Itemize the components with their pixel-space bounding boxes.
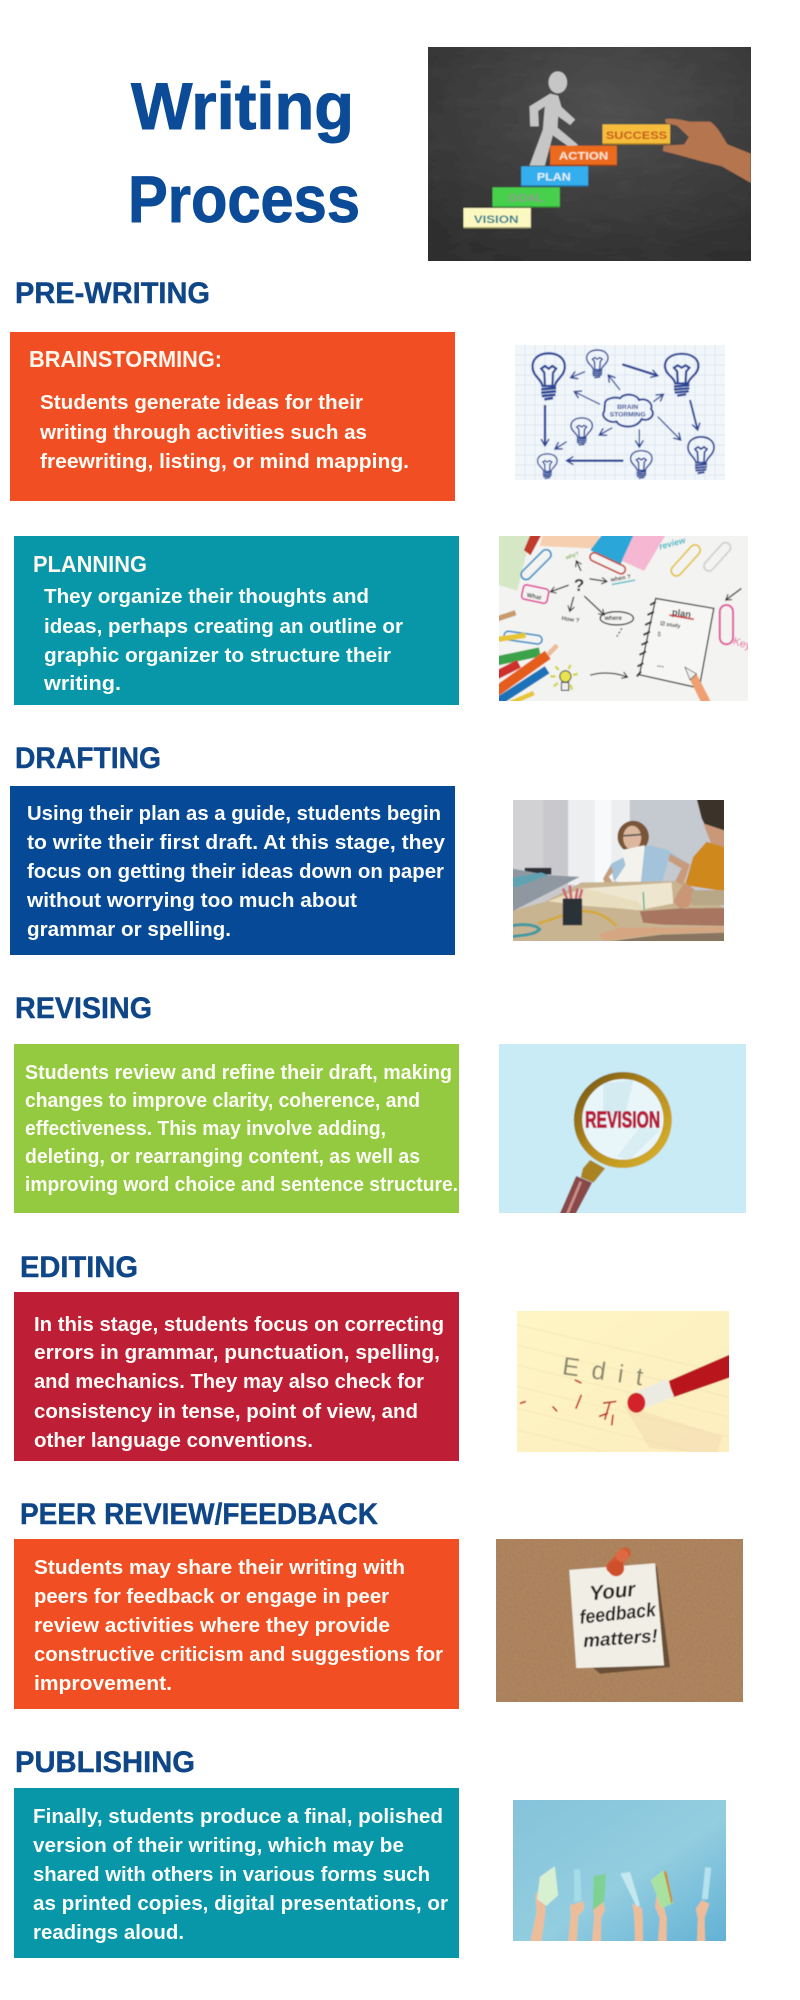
panel: brainstorming xyxy=(10,332,455,501)
text: revising description: effectiveness. This may involve adding, xyxy=(25,1117,386,1140)
image: planning notes with paper clips and pencils: How ? xyxy=(561,616,580,625)
image: figure climbing steps on chalkboard: PLAN xyxy=(537,171,571,183)
image: brainstorming bulbs sketch xyxy=(515,345,725,480)
text: planning description: They organize their thoughts and xyxy=(44,585,369,608)
panel: revising xyxy=(14,1044,459,1213)
title: Writing xyxy=(131,69,354,143)
text: publishing description xyxy=(33,1805,448,1944)
text: brainstorming description: Students generate ideas for their xyxy=(40,391,363,414)
text: planning description: ideas, perhaps creating an outline or xyxy=(44,615,403,638)
text: editing description: and mechanics. They may also check for xyxy=(34,1370,424,1393)
text: planning description xyxy=(43,585,403,695)
text: brainstorming description: writing through activities such as xyxy=(39,421,367,444)
panel: drafting xyxy=(10,786,455,955)
image: planning notes with paper clips and pencils: Key xyxy=(731,635,753,653)
text: drafting description: to write their first draft. At this stage, they xyxy=(27,831,446,854)
image: figure climbing steps on chalkboard: GOAL xyxy=(508,193,544,205)
title xyxy=(128,69,360,236)
panel: planning xyxy=(14,536,459,705)
image: figure climbing steps on chalkboard xyxy=(428,47,751,261)
text: revising description xyxy=(25,1061,458,1196)
heading: editing: EDITING xyxy=(20,1251,138,1284)
panel: peer review/feedback xyxy=(14,1539,459,1709)
text: publishing description: shared with others in various forms such xyxy=(33,1863,430,1886)
image: your feedback matters note on cork board xyxy=(496,1539,743,1702)
heading: publishing: PUBLISHING xyxy=(15,1746,195,1779)
heading: pre-writing: PRE-WRITING xyxy=(15,277,210,310)
subheading: planning: PLANNING xyxy=(33,551,147,577)
image: planning notes with paper clips and pencils: where xyxy=(604,616,623,622)
heading: drafting: DRAFTING xyxy=(15,742,161,775)
image: figure climbing steps on chalkboard: ACTION xyxy=(559,151,608,163)
text: drafting description: focus on getting their ideas down on paper xyxy=(27,860,444,883)
image: planning notes with paper clips and pencils: ☑ study xyxy=(660,621,681,630)
text: editing description xyxy=(34,1313,444,1452)
image: planning notes with paper clips and pencils: ? xyxy=(574,575,584,595)
subheading: brainstorming: BRAINSTORMING: xyxy=(29,346,222,372)
text: planning description: writing. xyxy=(43,672,121,695)
image: planning notes with paper clips and pencils xyxy=(499,535,753,701)
text: editing description: consistency in tense, point of view, and xyxy=(34,1400,418,1423)
text: editing description: other language conventions. xyxy=(34,1429,313,1452)
image: planning notes with paper clips and pencils: plan xyxy=(671,607,692,620)
image: raised hands holding books xyxy=(513,1800,726,1941)
text: brainstorming description: freewriting, listing, or mind mapping. xyxy=(40,450,409,473)
text: publishing description: readings aloud. xyxy=(33,1921,184,1944)
panel: publishing xyxy=(14,1788,459,1958)
title: Process xyxy=(128,162,360,236)
image: planning notes with paper clips and pencils: ... xyxy=(656,659,665,669)
image: students drafting at a table xyxy=(513,800,724,941)
text: publishing description: version of their writing, which may be xyxy=(33,1834,404,1857)
text: editing description: errors in grammar, punctuation, spelling, xyxy=(34,1341,440,1364)
text: publishing description: Finally, students produce a final, polished xyxy=(33,1805,443,1828)
image: figure climbing steps on chalkboard: VISION xyxy=(474,214,519,226)
text: revising description: changes to improve clarity, coherence, and xyxy=(25,1089,420,1112)
image: pencil eraser rubbing out the word edit: Edit xyxy=(561,1352,650,1392)
text: drafting description: without worrying too much about xyxy=(26,889,357,912)
image: figure climbing steps on chalkboard: SUCCESS xyxy=(606,130,667,142)
text: revising description: improving word choice and sentence structure. xyxy=(25,1173,458,1196)
image: your feedback matters note on cork board: feedback xyxy=(579,1600,658,1629)
text: publishing description: as printed copies, digital presentations, or xyxy=(33,1892,448,1915)
text: peer review description xyxy=(34,1556,443,1695)
image: magnifying glass over the word revision: REVISION xyxy=(585,1107,660,1133)
text: drafting description xyxy=(26,802,446,941)
text: peer review description: review activities where they provide xyxy=(34,1614,390,1637)
image: planning notes with paper clips and pencils: why? xyxy=(564,551,580,562)
image: planning notes with paper clips and pencils: What xyxy=(526,593,542,602)
text: peer review description: Students may share their writing with xyxy=(34,1556,405,1579)
heading: revising: REVISING xyxy=(15,992,152,1025)
text: peer review description: peers for feedback or engage in peer xyxy=(34,1585,389,1608)
text: brainstorming description xyxy=(39,391,409,473)
text: peer review description: constructive criticism and suggestions for xyxy=(34,1643,443,1666)
heading: peer review/feedback: PEER REVIEW/FEEDBACK xyxy=(20,1498,378,1531)
image: magnifying glass over the word revision xyxy=(499,1044,746,1213)
image: planning notes with paper clips and pencils: ▯ xyxy=(658,631,661,637)
text: peer review description: improvement. xyxy=(34,1672,172,1695)
text: drafting description: Using their plan as a guide, students begin xyxy=(27,802,441,825)
image: your feedback matters note on cork board: Your xyxy=(588,1578,637,1606)
text: editing description: In this stage, students focus on correcting xyxy=(34,1313,444,1336)
image: brainstorming bulbs sketch: BRAIN xyxy=(617,404,638,411)
text: revising description: deleting, or rearranging content, as well as xyxy=(25,1145,420,1168)
image: planning notes with paper clips and pencils: when ? xyxy=(609,574,632,584)
text: revising description: Students review and refine their draft, making xyxy=(25,1061,452,1084)
text: drafting description: grammar or spelling. xyxy=(27,918,231,941)
image: planning notes with paper clips and pencils: review xyxy=(658,535,688,552)
image: your feedback matters note on cork board: matters! xyxy=(582,1625,659,1651)
image: pencil eraser rubbing out the word edit xyxy=(517,1311,729,1452)
panel: editing xyxy=(14,1292,459,1461)
image: brainstorming bulbs sketch: STORMING xyxy=(610,412,646,419)
text: planning description: graphic organizer to structure their xyxy=(44,644,391,667)
